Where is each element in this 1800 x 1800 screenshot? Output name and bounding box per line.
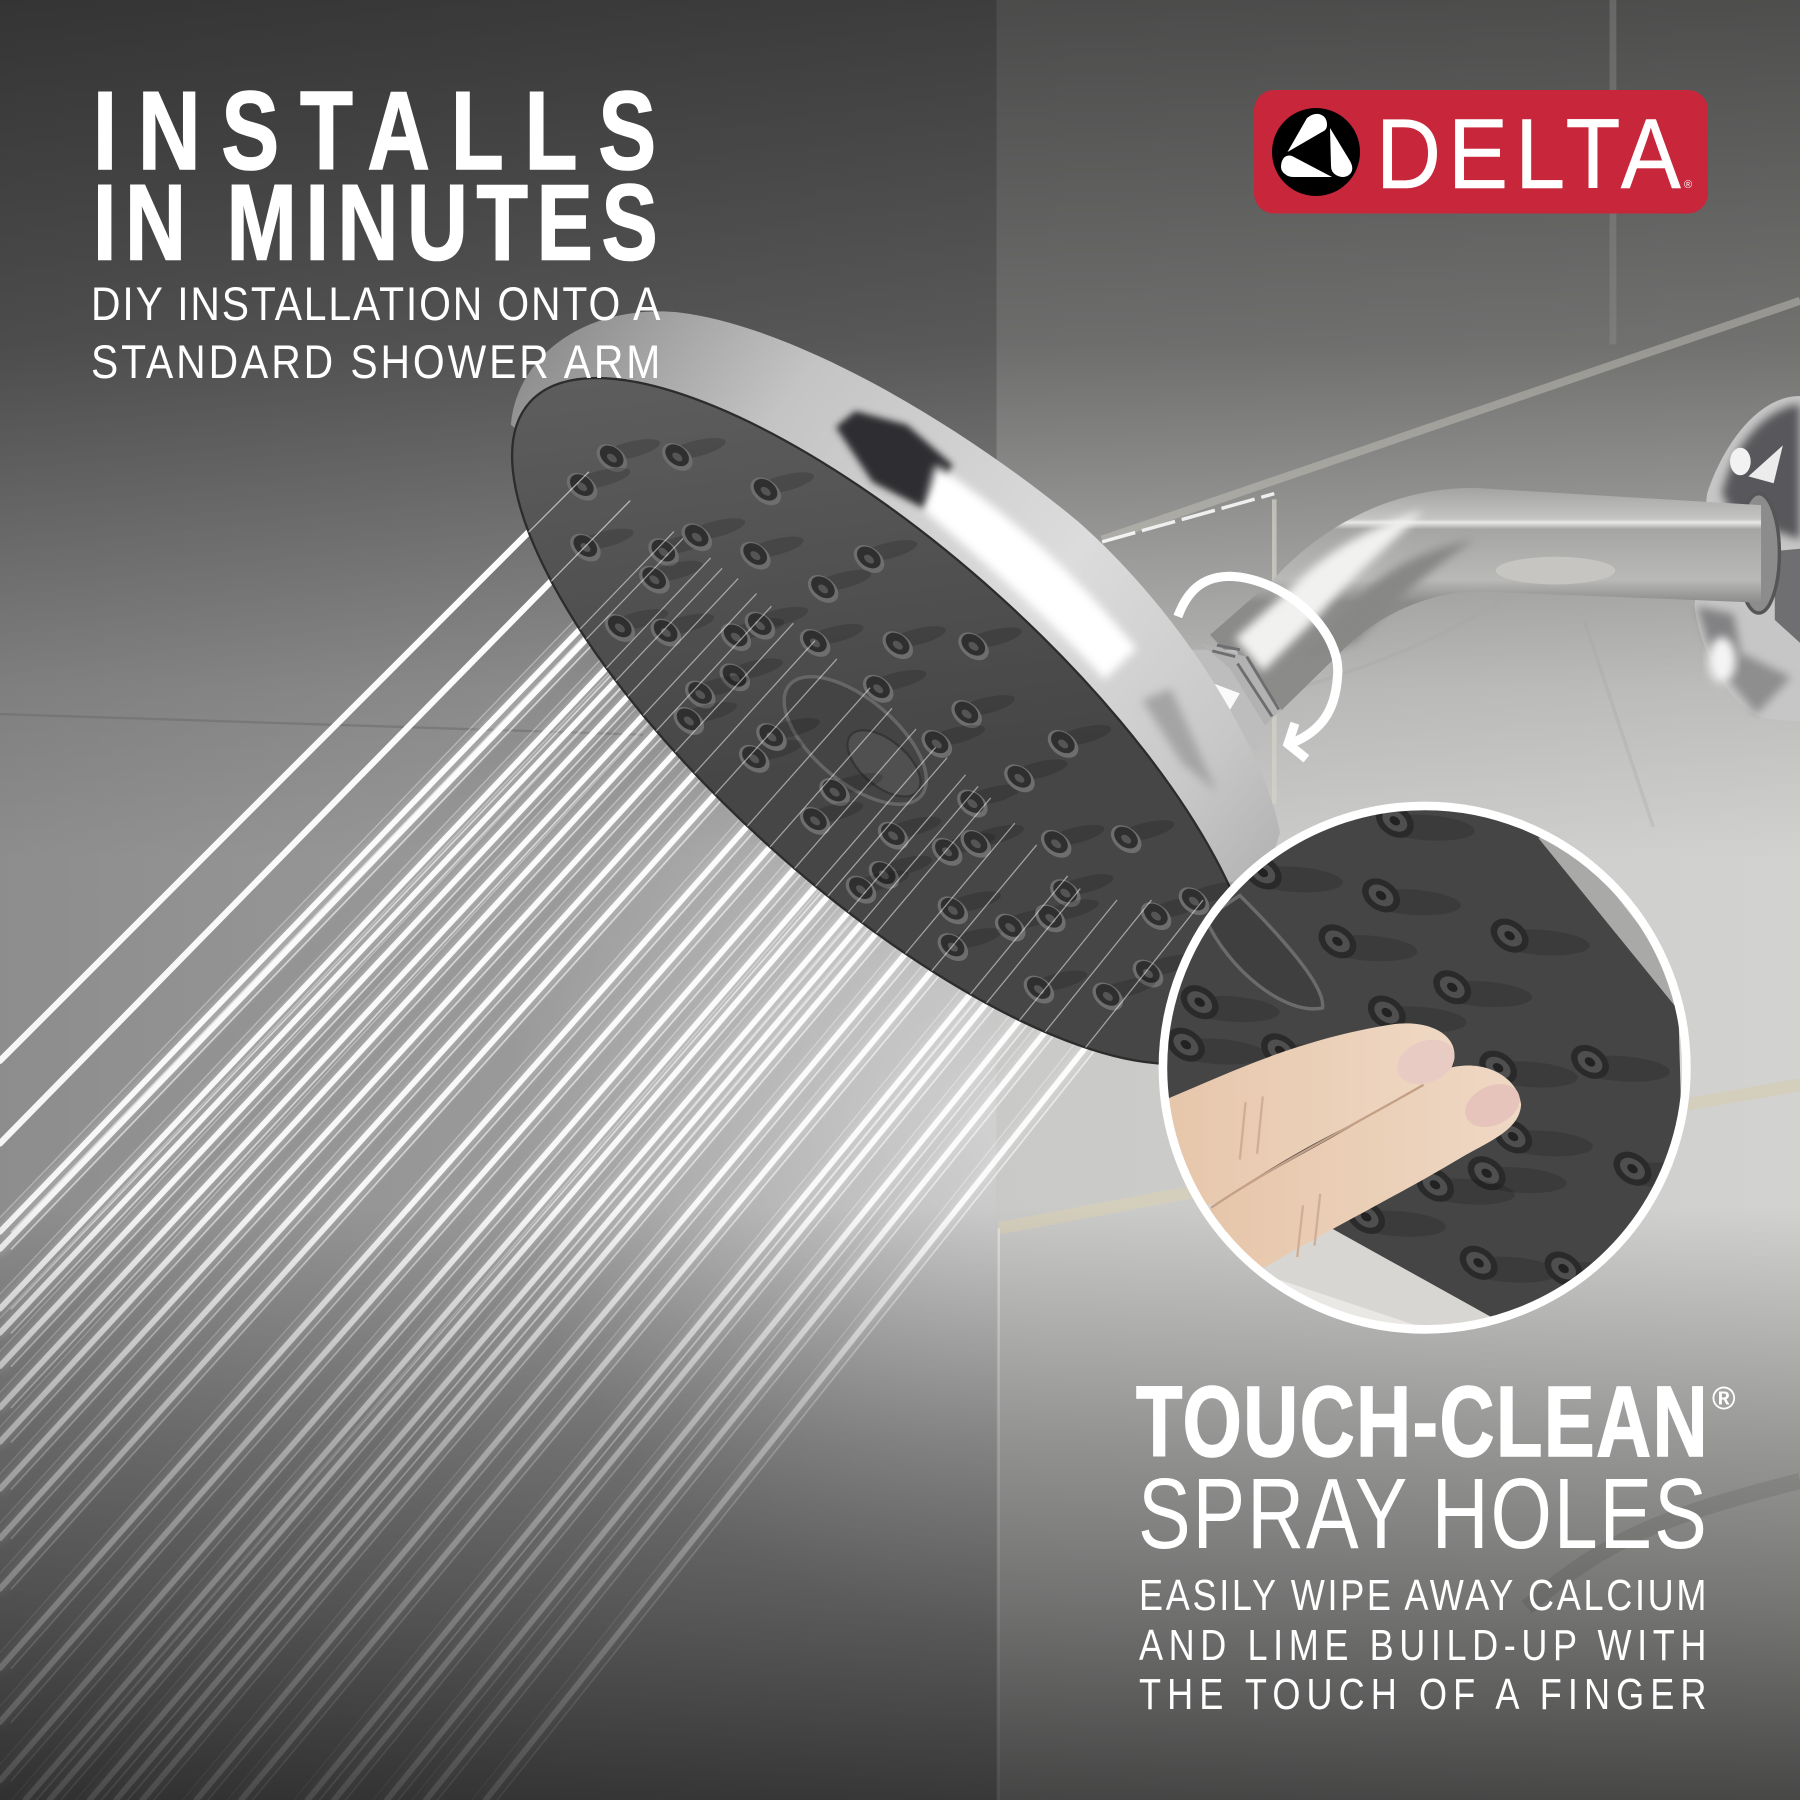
subtext: DIY installation: STANDARD SHOWER ARM: [91, 336, 660, 389]
heading: touch-clean spray holes: SPRAY HOLES: [1138, 1458, 1707, 1570]
thin water jets over face: [528, 472, 1204, 1048]
dark spray face: [416, 276, 1352, 1166]
heading: touch-clean spray holes: TOUCH-CLEAN: [1136, 1366, 1708, 1477]
inset contents: [1167, 810, 1681, 1326]
water spray streams: [0, 472, 1215, 1800]
subtext: DIY installation: [91, 278, 661, 389]
top vignette: [0, 0, 1800, 861]
centre oval: [763, 653, 948, 827]
heading: touch-clean spray holes: ®: [1712, 1380, 1736, 1416]
Delta logo: ®: [1684, 179, 1692, 191]
inset dark face: [1167, 810, 1681, 1316]
subtext: DIY installation: DIY INSTALLATION ONTO A: [91, 278, 661, 331]
spray nozzles: [561, 434, 1244, 1016]
fingers: [1159, 1023, 1527, 1272]
heading: touch-clean spray holes: [1136, 1366, 1736, 1570]
Delta logo: [1254, 90, 1708, 214]
subtext: easily wipe away: [1139, 1571, 1706, 1719]
curved arm: [1210, 488, 1761, 711]
arrow: rotate to install: [1178, 576, 1338, 759]
heading: installs in minutes: INSTALLS: [93, 70, 656, 194]
wall flange: [1694, 396, 1800, 721]
logo wordmark: DELTA: [1376, 99, 1681, 210]
subtext: easily wipe away: AND LIME BUILD-UP WITH: [1139, 1621, 1706, 1670]
heading: installs in minutes: IN MINUTES: [93, 161, 658, 283]
inset white ring: [1163, 806, 1686, 1329]
arm highlights: [1235, 511, 1615, 672]
shower arm and wall flange: [1181, 396, 1800, 753]
logo badge: [1254, 90, 1708, 214]
collar at wall: [1738, 494, 1779, 613]
subtext: easily wipe away: EASILY WIPE AWAY CALCIUM: [1139, 1571, 1706, 1620]
chrome rim: [511, 311, 1280, 976]
heading: installs in minutes: [93, 70, 658, 283]
inset nozzles: [1168, 811, 1670, 1284]
bottom vignette: [0, 1205, 1800, 1800]
threaded neck: [1181, 643, 1281, 753]
inset circle: finger wiping spray holes: [1158, 802, 1691, 1334]
logo emblem: [1272, 108, 1360, 196]
inset centre oval: [1205, 895, 1323, 1009]
subtext: easily wipe away: THE TOUCH OF A FINGER: [1139, 1670, 1706, 1719]
shower head: [510, 311, 1280, 1065]
